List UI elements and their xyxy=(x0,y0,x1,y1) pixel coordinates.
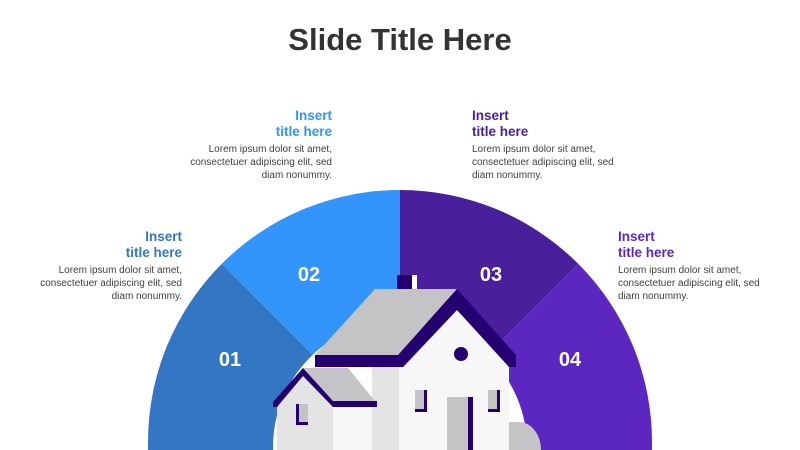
icon: house xyxy=(273,275,541,450)
text block 03: Insert xyxy=(472,108,509,123)
segment 03: 03 xyxy=(480,264,502,286)
text block 01: Insert xyxy=(145,229,182,244)
inner white circle xyxy=(273,320,527,450)
text block 02: title here xyxy=(276,124,332,139)
segment 04 xyxy=(400,264,652,450)
text block 01 xyxy=(40,229,182,302)
text block 03: consectetuer adipiscing elit, sed xyxy=(472,157,614,168)
segment 01 xyxy=(148,264,400,450)
text block 01: title here xyxy=(126,245,182,260)
text block 03: Lorem ipsum dolor sit amet, xyxy=(472,144,595,155)
text block 04 xyxy=(618,229,760,302)
text block 04: Lorem ipsum dolor sit amet, xyxy=(618,265,741,276)
segment 02 xyxy=(222,190,400,442)
text block 01: consectetuer adipiscing elit, sed xyxy=(40,278,182,289)
text block 04: title here xyxy=(618,245,674,260)
text block 04: consectetuer adipiscing elit, sed xyxy=(618,278,760,289)
segment 04: 04 xyxy=(559,349,582,371)
text block 01: Lorem ipsum dolor sit amet, xyxy=(59,265,182,276)
text block 04: Insert xyxy=(618,229,655,244)
text block 02: Lorem ipsum dolor sit amet, xyxy=(209,144,332,155)
text block 02: Insert xyxy=(295,108,332,123)
segment 02: 02 xyxy=(298,264,320,286)
text block 02: diam nonummy. xyxy=(262,170,332,181)
text block 03 xyxy=(472,108,614,181)
text block 03: title here xyxy=(472,124,528,139)
text block 02: consectetuer adipiscing elit, sed xyxy=(190,157,332,168)
text block 02 xyxy=(190,108,332,181)
text block 01: diam nonummy. xyxy=(112,291,182,302)
segment 03 xyxy=(400,190,578,442)
text block 03: diam nonummy. xyxy=(472,170,542,181)
text block 04: diam nonummy. xyxy=(618,291,688,302)
segment 01: 01 xyxy=(219,349,241,371)
title: Slide Title Here xyxy=(288,22,512,57)
